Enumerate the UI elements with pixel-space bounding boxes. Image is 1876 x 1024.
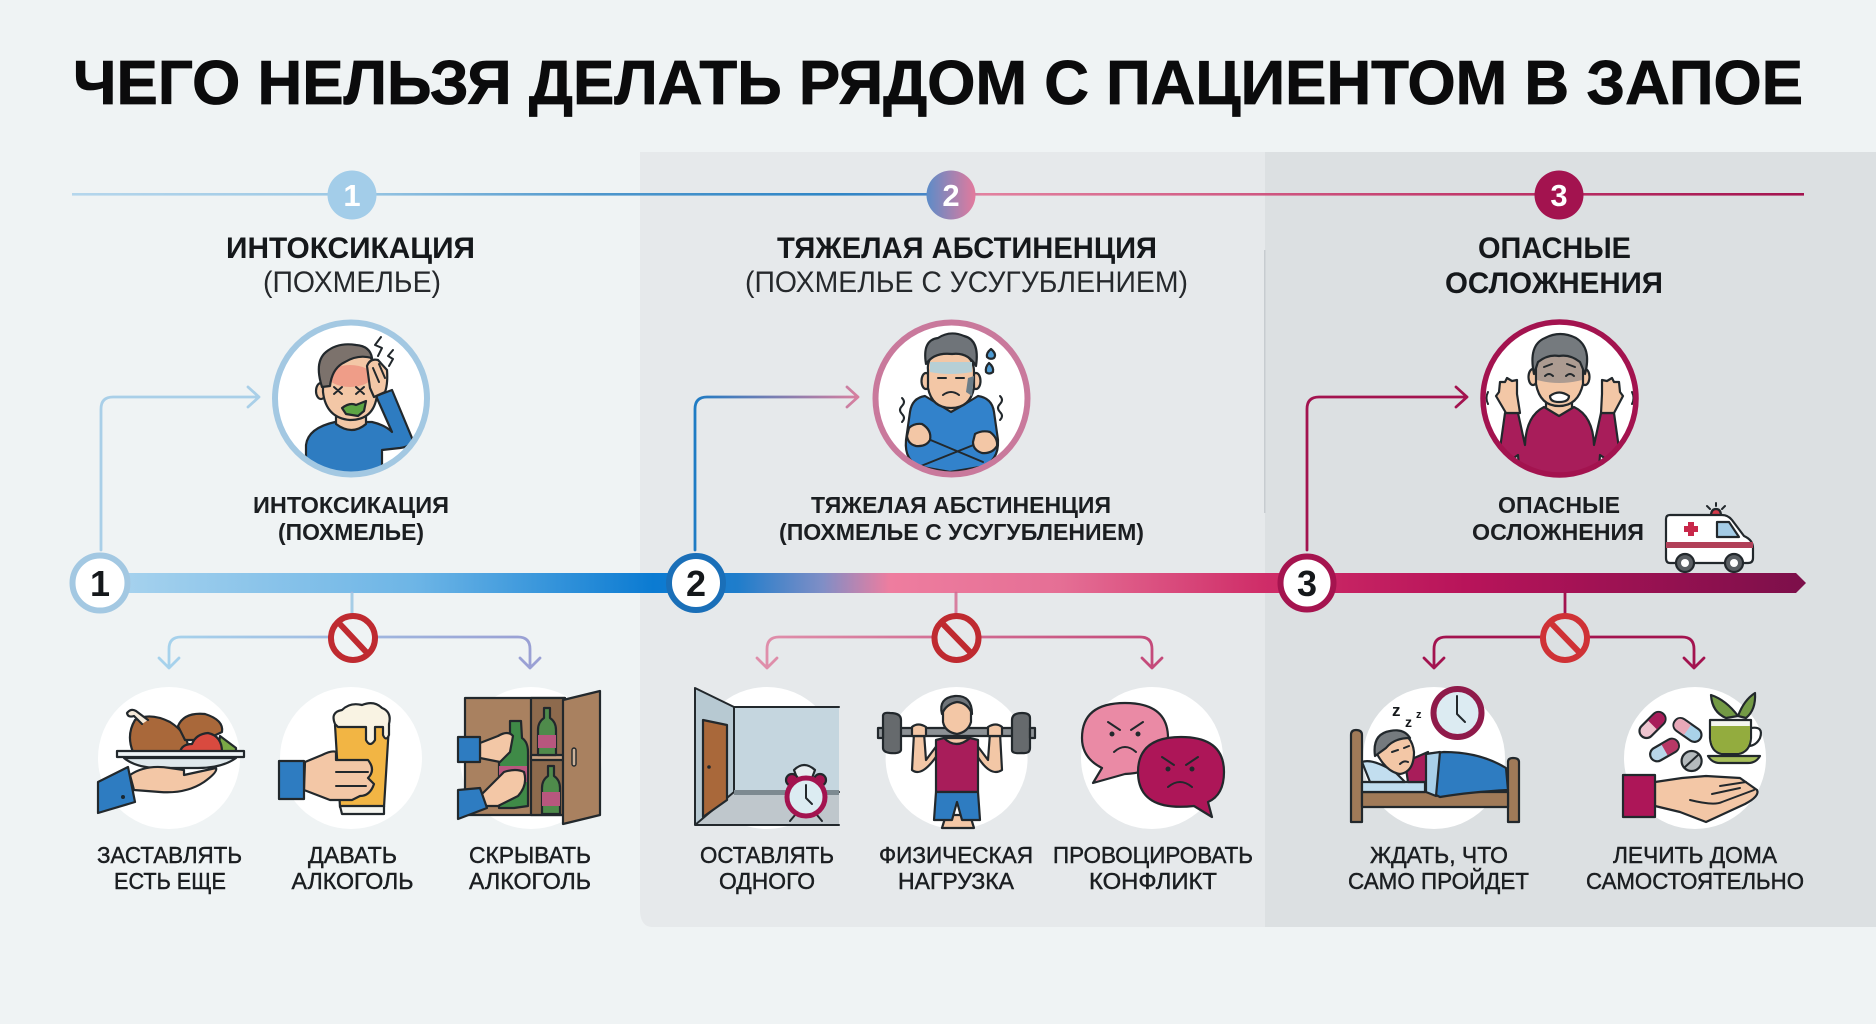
prohibition branch 3 <box>1424 593 1704 668</box>
timeline marker 3: 3 <box>1297 563 1317 604</box>
label: give alcohol <box>292 842 414 894</box>
stage badge 3: 3 <box>1550 178 1568 213</box>
label: wait until it passes <box>1348 842 1529 894</box>
portrait: man with headache and nausea <box>275 322 427 480</box>
subheading stage 2: ТЯЖЕЛАЯ АБСТИНЕНЦИЯ <box>811 492 1111 518</box>
arrow to portrait 3 <box>1307 387 1467 550</box>
main timeline bar <box>100 573 1806 593</box>
panel: stage 3 dangerous complications <box>1280 170 1804 894</box>
label: hide alcohol: СКРЫВАТЬ <box>469 842 591 868</box>
timeline marker 3 <box>1280 556 1334 610</box>
subheading stage 1 <box>253 492 449 545</box>
label: force to eat: ЕСТЬ ЕЩЕ <box>114 868 226 894</box>
icon: sleeping man in bed with clock <box>1351 687 1519 829</box>
stage badge 3 <box>1534 170 1584 220</box>
timeline marker 1: 1 <box>90 563 110 604</box>
top stage line <box>72 193 1804 196</box>
heading stage 1: ИНТОКСИКАЦИЯ <box>226 232 475 265</box>
subheading stage 2 <box>779 492 1144 545</box>
stage badge 1: 1 <box>343 178 361 213</box>
heading stage 1: (ПОХМЕЛЬЕ) <box>263 266 441 299</box>
timeline marker 2: 2 <box>686 563 706 604</box>
subheading stage 3: ОПАСНЫЕ <box>1498 492 1620 518</box>
icon: sleeping man in bed with clock: z <box>1392 701 1400 720</box>
icon: empty room with alarm clock <box>695 687 839 829</box>
panel background: stage 3 <box>1265 152 1876 927</box>
portrait: shivering man <box>876 322 1028 474</box>
heading stage 2: ТЯЖЕЛАЯ АБСТИНЕНЦИЯ <box>777 232 1157 265</box>
subheading stage 1: ИНТОКСИКАЦИЯ <box>253 492 449 518</box>
panel background: stage 2 <box>640 152 1265 927</box>
subheading stage 3: ОСЛОЖНЕНИЯ <box>1472 519 1644 545</box>
prohibition branch 1 <box>159 593 540 668</box>
portrait: man with tremor <box>1483 322 1636 482</box>
arrow to portrait 1 <box>101 387 259 550</box>
heading stage 2: (ПОХМЕЛЬЕ С УСУГУБЛЕНИЕМ) <box>745 266 1188 299</box>
timeline marker 2 <box>669 556 723 610</box>
heading stage 3: ОСЛОЖНЕНИЯ <box>1445 267 1663 300</box>
heading stage 2 <box>745 232 1188 299</box>
icon: hand giving beer <box>279 687 422 829</box>
stage badge 2: 2 <box>942 178 960 213</box>
label: hide alcohol <box>469 842 591 894</box>
icon: sleeping man in bed with clock: z <box>1405 714 1412 730</box>
label: force to eat: ЗАСТАВЛЯТЬ <box>97 842 242 868</box>
label: wait until it passes: ЖДАТЬ, ЧТО <box>1370 842 1508 868</box>
stage badge 2 <box>926 170 976 220</box>
label: wait until it passes: САМО ПРОЙДЕТ <box>1348 867 1529 894</box>
label: provoke conflict: КОНФЛИКТ <box>1089 868 1217 894</box>
arrow to portrait 2 <box>695 387 858 550</box>
icon: man lifting barbell <box>878 687 1035 829</box>
title: ЧЕГО НЕЛЬЗЯ ДЕЛАТЬ РЯДОМ С ПАЦИЕНТОМ В ЗАПОЕ <box>73 49 1803 118</box>
label: provoke conflict <box>1053 842 1253 894</box>
heading stage 3: ОПАСНЫЕ <box>1478 232 1631 265</box>
label: leave alone <box>700 842 834 894</box>
heading stage 1 <box>226 232 475 299</box>
label: treat at home alone: САМОСТОЯТЕЛЬНО <box>1586 868 1804 894</box>
subheading stage 3 <box>1472 492 1644 545</box>
icon: angry speech bubbles <box>1081 687 1224 829</box>
icon: sleeping man in bed with clock: z <box>1416 709 1422 721</box>
heading stage 3 <box>1445 232 1663 300</box>
timeline marker 1 <box>72 556 128 610</box>
label: give alcohol: АЛКОГОЛЬ <box>292 868 414 894</box>
label: treat at home alone: ЛЕЧИТЬ ДОМА <box>1613 842 1778 868</box>
label: force to eat <box>97 842 242 894</box>
label: physical load: НАГРУЗКА <box>898 868 1015 894</box>
panel: stage 2 severe withdrawal <box>669 170 1253 894</box>
label: give alcohol: ДАВАТЬ <box>308 842 397 868</box>
subheading stage 1: (ПОХМЕЛЬЕ) <box>278 519 424 545</box>
icon: hand serving food plate <box>98 687 244 829</box>
label: leave alone: ОДНОГО <box>719 868 815 894</box>
label: hide alcohol: АЛКОГОЛЬ <box>469 868 591 894</box>
stage badge 1 <box>328 170 376 220</box>
label: leave alone: ОСТАВЛЯТЬ <box>700 842 834 868</box>
label: physical load <box>879 842 1033 894</box>
subheading stage 2: (ПОХМЕЛЬЕ С УСУГУБЛЕНИЕМ) <box>779 519 1144 545</box>
panel: stage 1 intoxication <box>72 170 602 894</box>
icon: hand with pills and herbal tea <box>1623 687 1766 829</box>
icon: hiding bottles in cabinet <box>458 687 602 829</box>
label: treat at home alone <box>1586 842 1804 894</box>
icon: ambulance <box>1666 503 1753 572</box>
label: physical load: ФИЗИЧЕСКАЯ <box>879 842 1033 868</box>
prohibition branch 2 <box>757 593 1162 668</box>
label: provoke conflict: ПРОВОЦИРОВАТЬ <box>1053 842 1253 868</box>
